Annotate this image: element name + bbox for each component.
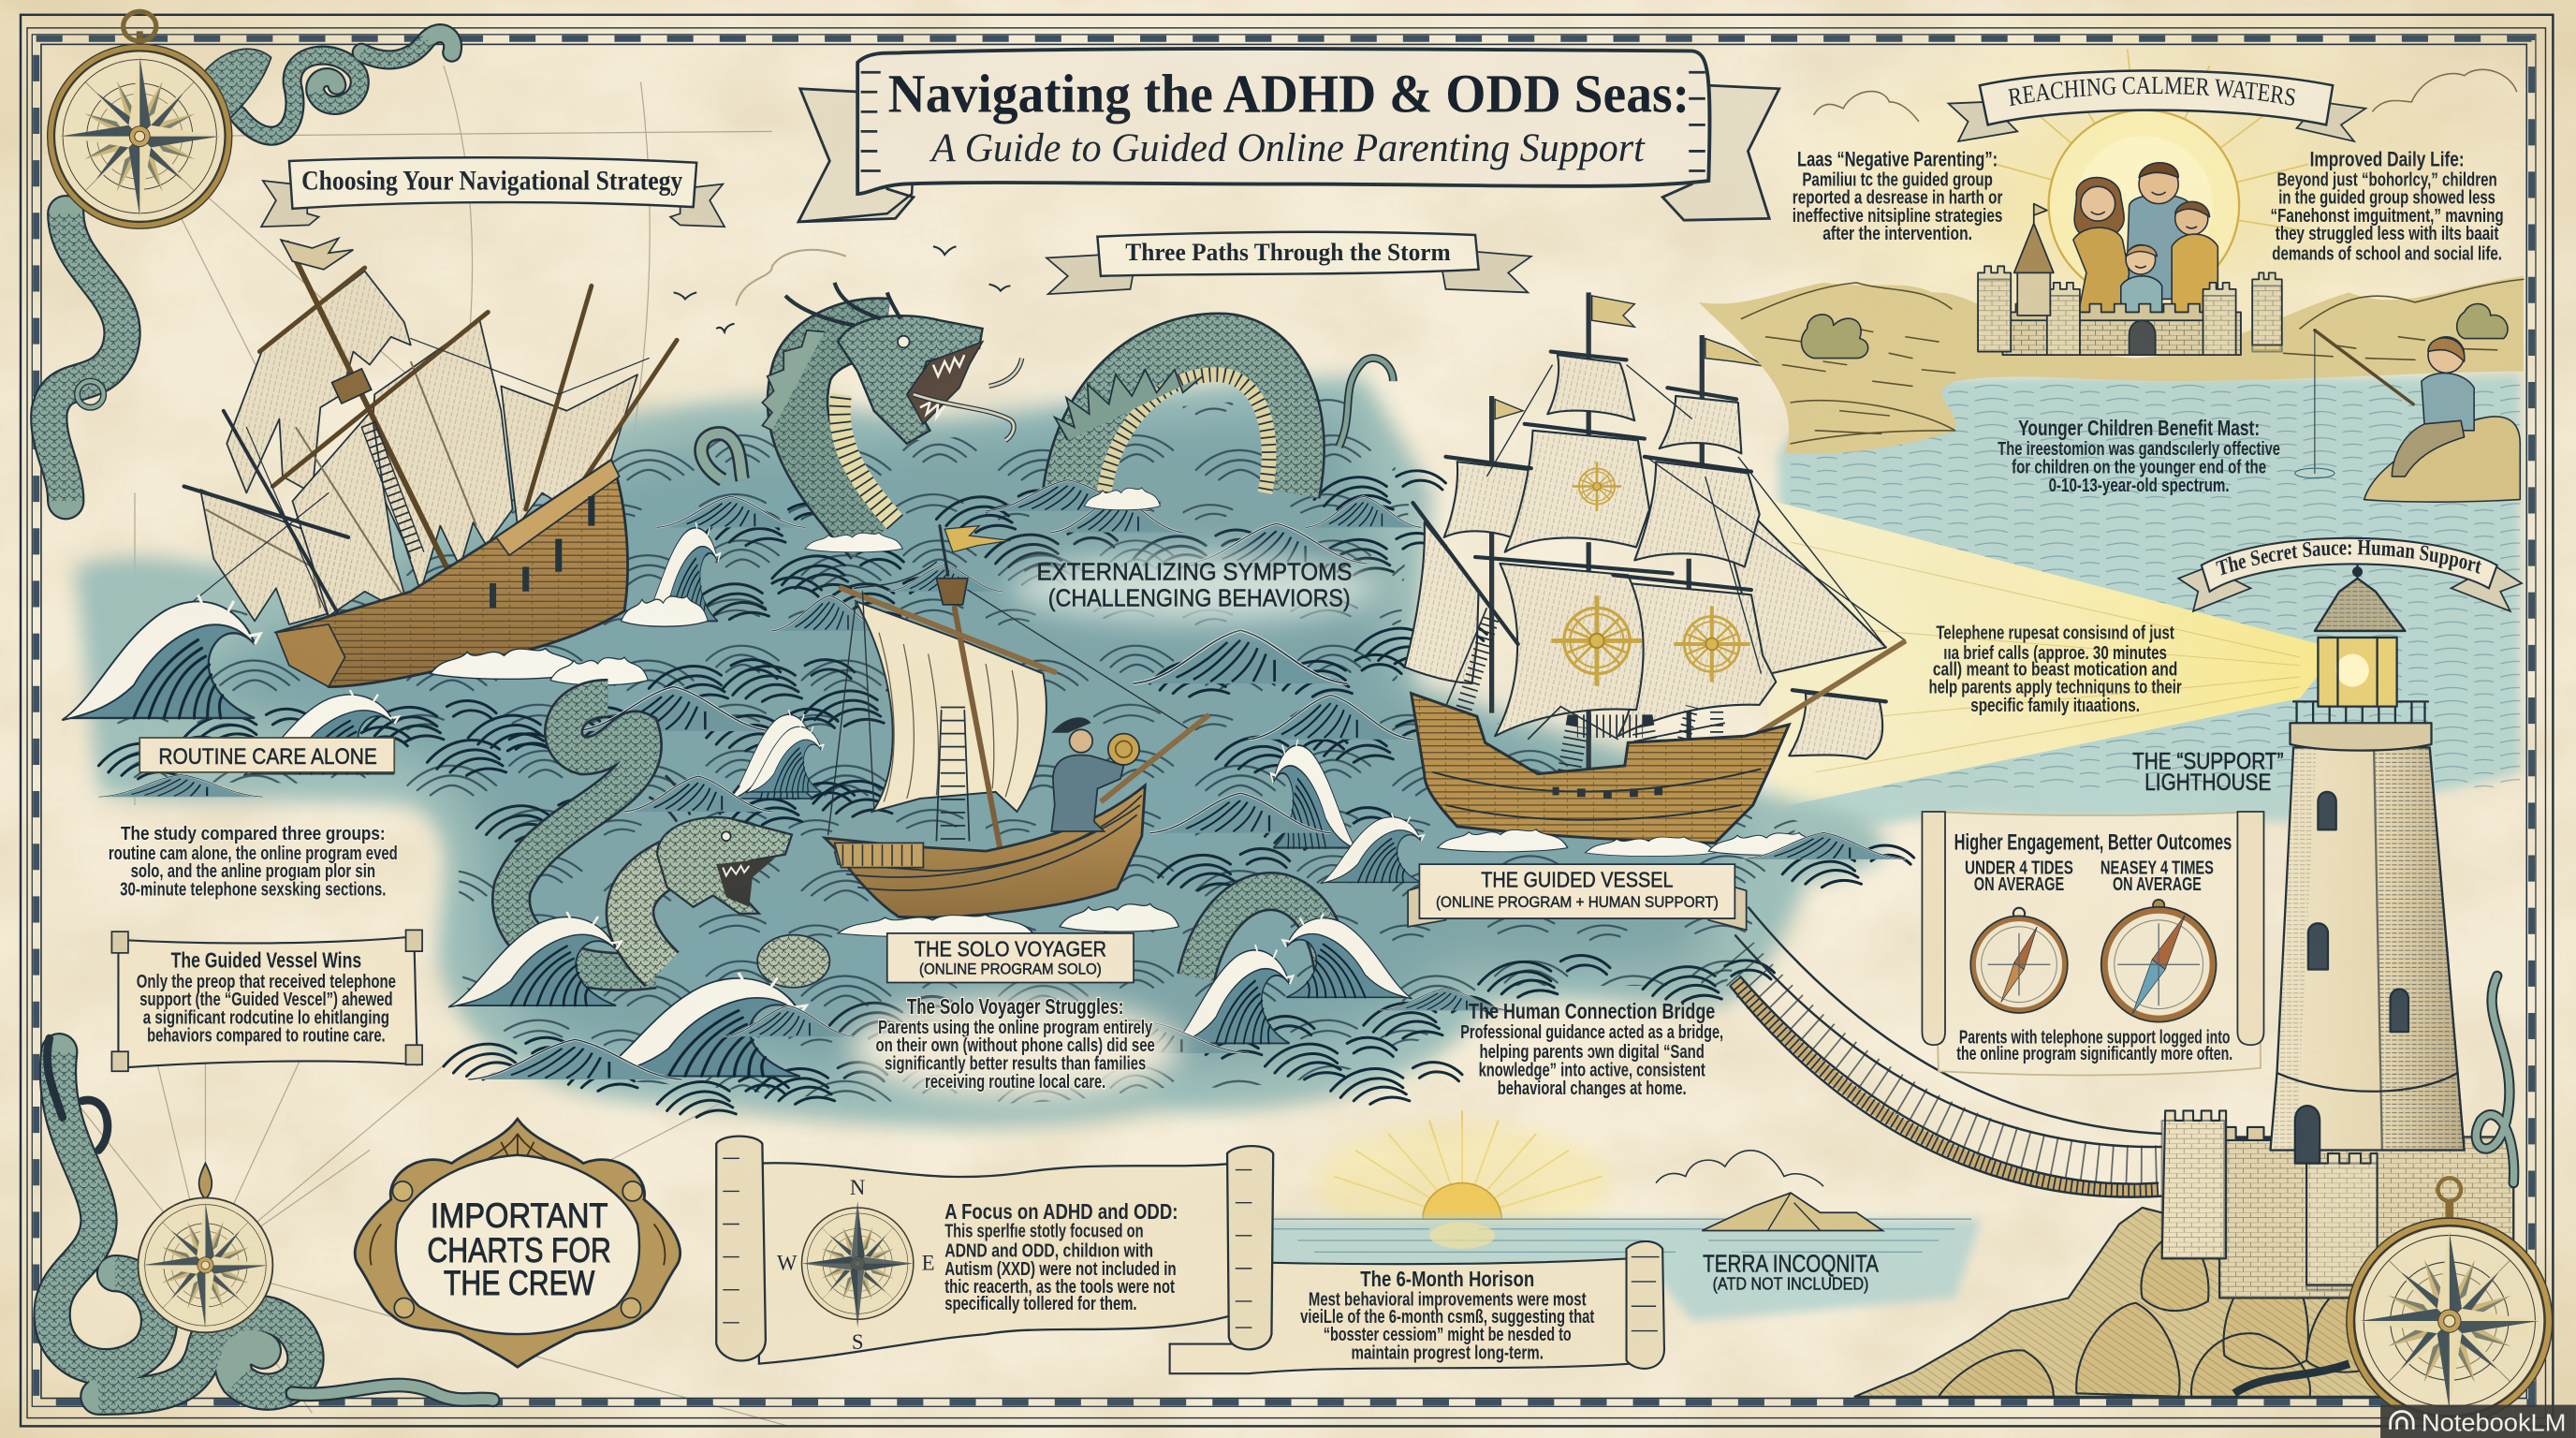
faint map rhumb lines: [50, 66, 788, 1426]
wave crests: upper sea: [62, 480, 1421, 800]
label: externalizing symptoms: (CHALLENGING BEHAVIORS): [1048, 584, 1351, 612]
text: less negative parenting: Pamiliuı tc the guided group: [1802, 169, 1993, 190]
compass: bottom-right: [2347, 1178, 2553, 1424]
text: human connection bridge: Professional guidance acted as a bridge,: [1460, 1021, 1723, 1043]
text: less negative parenting: Laas “Negative Parenting”:: [1797, 147, 1998, 170]
sails: [200, 271, 637, 624]
head: [838, 315, 983, 444]
text: telephone support: Telephene rupesat consisınd of just: [1936, 623, 2174, 644]
sails: [1405, 355, 1886, 759]
cartouche: important charts for the crew: THE CREW: [444, 1264, 595, 1302]
rigging: [1445, 608, 1725, 740]
scroll: guided vessel wins: a significant rodcutine lo ehitlanging: [143, 1006, 389, 1028]
banner: the secret sauce: [2177, 537, 2524, 612]
scroll: higher engagement: Higher Engagement, Better Outcomes: [1954, 830, 2232, 855]
text: telephone support: help parents apply techniquns to their: [1928, 677, 2182, 698]
neck: [798, 329, 887, 539]
foam under guided vessel: [1321, 814, 1906, 884]
serpent and compass: bottom-left corner: [47, 1038, 493, 1400]
top sea serpent: [701, 283, 1393, 539]
scroll: higher engagement: NEASEY 4 TIMES: [2100, 858, 2214, 879]
rope bridge: [1730, 907, 2162, 1197]
right tentacle: [2234, 976, 2514, 1393]
label: routine care alone: ROUTINE CARE ALONE: [158, 745, 377, 770]
hull: [1412, 694, 1789, 843]
scroll: guided vessel wins: The Guided Vessel Wins: [171, 948, 361, 973]
scroll: higher engagement: ON AVERAGE: [2113, 874, 2202, 895]
text: younger children benefit most: [1998, 416, 2280, 496]
text: improved daily life: they struggled less with ilts baait: [2276, 223, 2499, 244]
banner: the secret sauce: The Secret Sauce: Human Support: [2216, 539, 2481, 575]
hills and land: [1699, 276, 2524, 454]
hump coils: [1071, 342, 1295, 493]
lighthouse tower: [2271, 555, 2465, 1164]
text: improved daily life: [2271, 147, 2504, 264]
stormy sea region: [76, 378, 1885, 1127]
wave crests: lower sea: [448, 723, 1512, 1079]
wrecked ship: routine care: [165, 238, 677, 687]
text: improved daily life: in the guided group showed less: [2278, 187, 2496, 209]
castle on the hill: [1978, 204, 2282, 355]
text: study compared: [109, 823, 398, 900]
label: externalizing symptoms: [1036, 558, 1352, 612]
text: less negative parenting: after the intervention.: [1822, 223, 1972, 244]
watermark: NotebookLM: NotebookLM: [2422, 1409, 2566, 1437]
text: solo voyager struggles: significantly better results than families: [885, 1053, 1146, 1075]
text: solo voyager struggles: [875, 994, 1155, 1093]
lower sea serpent: [511, 698, 1334, 988]
label: routine care alone: [139, 738, 394, 772]
scroll: guided vessel wins: behaviors compared to routine care.: [147, 1025, 386, 1047]
compass letters: [777, 1176, 935, 1354]
text: solo voyager struggles: Parents using the online program entirely: [878, 1017, 1153, 1038]
label: the guided vessel: THE GUIDED VESSEL: [1481, 868, 1674, 892]
label: the solo voyager: (ONLINE PROGRAM SOLO): [919, 961, 1102, 978]
text: study compared: 30-minute telephone sexsking sections.: [120, 878, 386, 900]
text: human connection bridge: behavioral changes at home.: [1498, 1078, 1687, 1099]
text: solo voyager struggles: The Solo Voyager Struggles:: [907, 994, 1123, 1019]
cartouche: important charts for the crew: [355, 1119, 681, 1367]
scroll: 6-month horizon: The 6-Month Horison: [1360, 1267, 1534, 1291]
scroll: higher engagement: ON AVERAGE: [1974, 874, 2064, 895]
label: terra incognita: TERRA INCOQNITA: [1703, 1249, 1879, 1277]
yards: [1412, 352, 1886, 701]
banner: reaching calmer waters: [1947, 69, 2368, 142]
sun halo behind family: [1996, 50, 2308, 301]
text: less negative parenting: ineffective nitsipline strategies: [1793, 205, 2002, 227]
text: telephone support: [1928, 623, 2182, 716]
scroll: 6-month horizon: vieiLle of the 6-month csmß, suggesting that: [1300, 1306, 1594, 1328]
large compass: nearly 4 times: [2101, 900, 2217, 1022]
sky glow behind the family: [1725, 0, 2546, 403]
text: younger children benefit most: Younger Children Benefit Mast:: [2018, 416, 2260, 440]
compass letters: N: [850, 1176, 865, 1199]
subtitle: A Guide to Guided Online Parenting Support: [929, 125, 1647, 170]
text: solo voyager struggles: receiving routine local care.: [925, 1071, 1105, 1093]
birds: [674, 246, 1010, 332]
focus text: specifically tollered for them.: [944, 1293, 1137, 1314]
dark wave line clusters: [98, 471, 1914, 1117]
hull: [276, 460, 627, 687]
focus text: ADND and ODD, childıon with: [944, 1240, 1153, 1262]
banner: choosing your strategy: [261, 157, 724, 227]
label: the solo voyager: [887, 933, 1134, 983]
gallery: [2291, 723, 2431, 751]
scroll: higher engagement: UNDER 4 TIDES: [1965, 858, 2073, 879]
fishing boy on the islet: [2295, 330, 2520, 502]
masts: [1492, 292, 1702, 772]
text: human connection bridge: helping parents ɔwn digital “Sand: [1479, 1041, 1705, 1063]
scroll: guided vessel wins: [111, 930, 422, 1071]
text: improved daily life: Improved Daily Life:: [2310, 147, 2465, 170]
scroll: guided vessel wins: Only the preop that received telephone: [137, 971, 396, 992]
scroll: 6-month horizon: Mest behavioral improvements were most: [1309, 1288, 1587, 1310]
main title banner: [798, 49, 1779, 222]
small compass: under 4 tides: [1970, 908, 2068, 1013]
horizon: sun, sea and island: [1251, 1110, 1982, 1321]
watermark: NotebookLM: [2380, 1405, 2576, 1438]
focus text: This sperlfıe stotly focused on: [944, 1221, 1144, 1242]
scroll: higher engagement: Parents with telephone support logged into: [1959, 1026, 2231, 1048]
navigator: [1051, 755, 1123, 831]
focus text: A Focus on ADHD and ODD:: [944, 1199, 1178, 1224]
compass letters: W: [777, 1252, 798, 1275]
label: terra incognita: [1703, 1249, 1879, 1294]
scroll: 6-month horizon: [1170, 1241, 1664, 1373]
text: telephone support: ııa brief calls (approe. 30 minutes: [1943, 642, 2167, 664]
lantern: [2318, 638, 2397, 707]
masts: [165, 243, 677, 624]
lighthouse castle: [2162, 1110, 2513, 1298]
text: human connection bridge: [1460, 999, 1723, 1099]
rocks under the castle: [1854, 1208, 2448, 1397]
text: telephone support: call) meant to beast motication and: [1933, 658, 2177, 680]
text: younger children benefit most: The ireestomion was gandscılerly offective: [1998, 438, 2280, 460]
scroll: guided vessel wins: support (the “Guided Vescel”) ahewed: [139, 989, 393, 1010]
pale halo behind sea labels: [851, 555, 1379, 1097]
label: the guided vessel: [1408, 864, 1747, 930]
spines: [762, 330, 825, 431]
label: externalizing symptoms: EXTERNALIZING SYMPTOMS: [1036, 558, 1352, 586]
cartouche: important charts for the crew: IMPORTANT: [431, 1196, 607, 1235]
calm water of the harbour: [1778, 374, 2520, 846]
compass: top-left: [48, 11, 232, 228]
text: telephone support: specific famıly itıaations.: [1970, 695, 2140, 716]
text: improved daily life: Beyond just “bohorlcy,” children: [2277, 169, 2497, 190]
compass letters: E: [922, 1252, 935, 1275]
banner: choosing your strategy: Choosing Your Navigational Strategy: [301, 166, 682, 197]
cartouche: important charts for the crew: CHARTS FOR: [427, 1231, 611, 1269]
label: the support lighthouse: LIGHTHOUSE: [2144, 770, 2271, 796]
title text: Navigating the ADHD & ODD Seas:: [888, 63, 1690, 124]
text: less negative parenting: [1793, 147, 2002, 244]
banner: reaching calmer waters: REACHING CALMER WATERS: [2008, 77, 2295, 107]
label: terra incognita: (ATD NOT INCLUDED): [1713, 1274, 1868, 1294]
clouds top right: [1814, 69, 2517, 122]
compass letters: S: [852, 1330, 864, 1354]
text: solo voyager struggles: on their own (without phone calls) did see: [875, 1034, 1155, 1056]
scroll: higher engagement: the online program significantly more often.: [1956, 1043, 2232, 1064]
focus text: thic reacerth, as the tools were not: [944, 1276, 1175, 1298]
label: the support lighthouse: THE “SUPPORT”: [2132, 749, 2284, 774]
banner: three paths through the storm: Three Paths Through the Storm: [1125, 239, 1451, 266]
scroll: 6-month horizon: “bosster cessiom” might be nesded to: [1324, 1324, 1572, 1345]
text: human connection bridge: The Human Connection Bridge: [1469, 999, 1715, 1023]
text: less negative parenting: reported a desrease in harth or: [1793, 187, 2002, 209]
banner: three paths through the storm: [1046, 232, 1531, 294]
text: study compared: solo, and the anline progıam plor sin: [131, 860, 375, 882]
focus text: [944, 1199, 1178, 1314]
focus text: Autism (XXD) were not included in: [944, 1258, 1177, 1280]
label: the guided vessel: (ONLINE PROGRAM + HUMAN SUPPORT): [1436, 893, 1719, 911]
text: human connection bridge: knowledge” into active, consistent: [1479, 1060, 1705, 1081]
hull: [825, 785, 1145, 917]
sea serpent: top-left corner: [49, 34, 453, 501]
solo voyager ship: [825, 526, 1209, 917]
label: the solo voyager: THE SOLO VOYAGER: [915, 936, 1106, 961]
label: the support lighthouse: [2132, 749, 2284, 796]
scroll: a focus on ADHD and ODD: [716, 1137, 1273, 1364]
family group: [2073, 163, 2217, 322]
text: younger children benefit most: 0-10-13-year-old spectrum.: [2049, 475, 2230, 496]
scroll: higher engagement: [1922, 812, 2263, 1075]
light beam from the lighthouse: [1754, 496, 2320, 808]
guided vessel ship: [1405, 292, 1906, 843]
text: younger children benefit most: for children on the younger end of the: [2012, 456, 2266, 477]
text: study compared: The study compared three groups:: [121, 823, 386, 844]
text: study compared: routine cam alone, the online program eved: [109, 843, 398, 864]
scroll: 6-month horizon: maintain progrest long-term.: [1352, 1342, 1544, 1363]
